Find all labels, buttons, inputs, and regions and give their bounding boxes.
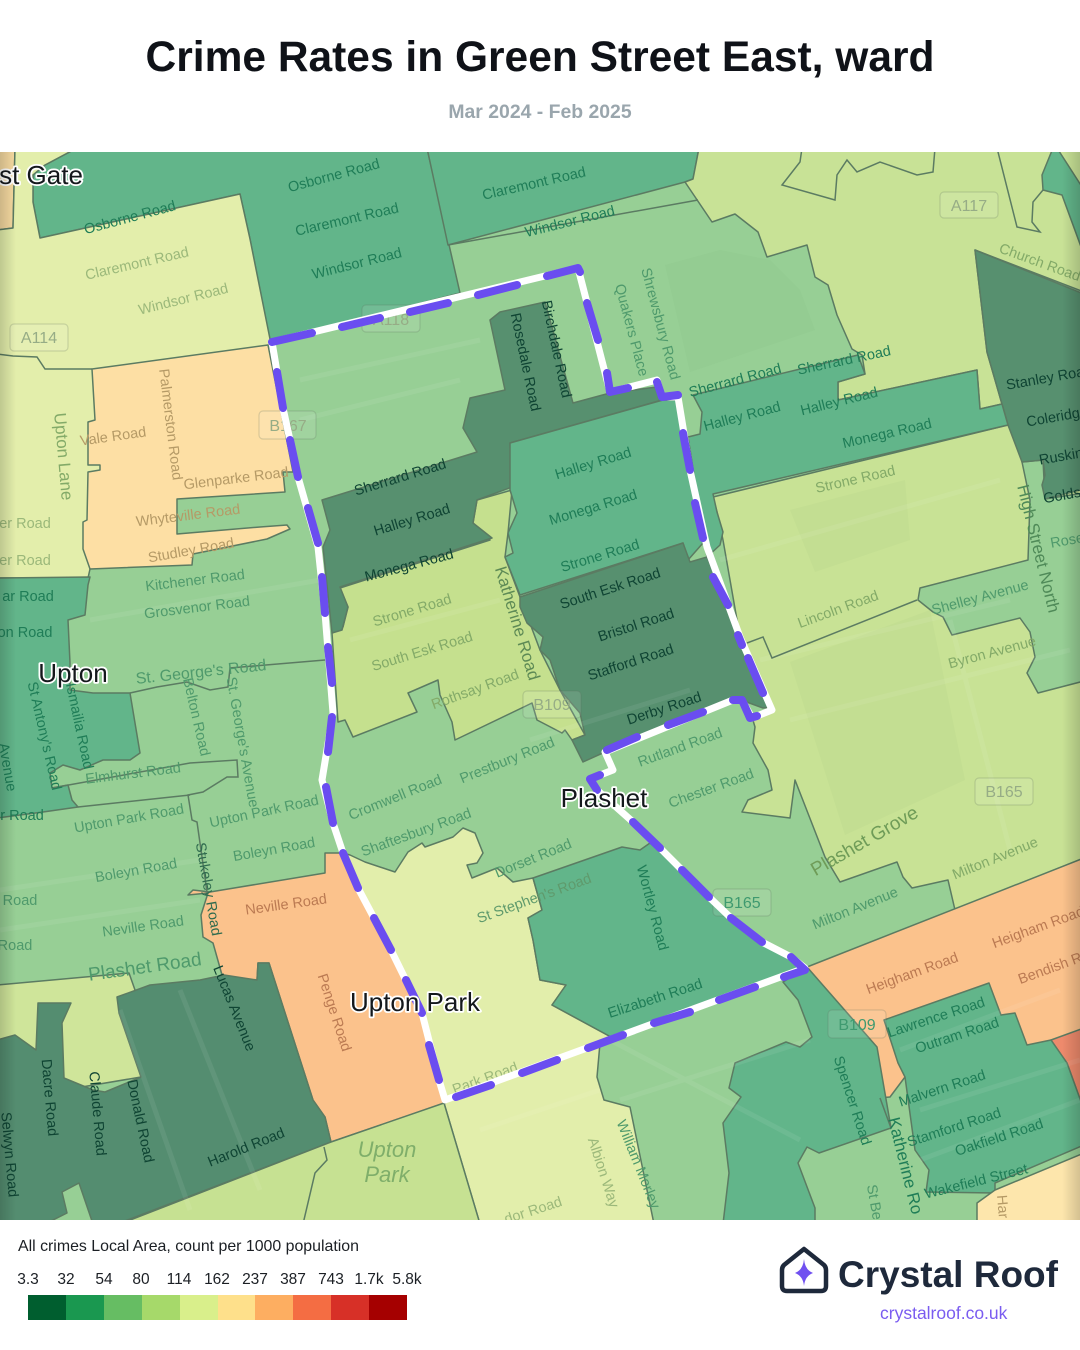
area: Claremont Road north bbox=[427, 148, 699, 245]
place names: Upton bbox=[38, 658, 108, 688]
street labels: Harold Road bbox=[206, 1125, 287, 1171]
street labels: St. George's Avenue bbox=[223, 676, 261, 809]
park label: Upton Park: Upton bbox=[358, 1137, 416, 1162]
street labels: Cromwell Road bbox=[346, 772, 444, 824]
area: west edge teal bbox=[0, 577, 140, 818]
street labels: Monega Road bbox=[547, 487, 639, 529]
legend scale values bbox=[17, 1271, 422, 1288]
street labels: Har bbox=[993, 1194, 1011, 1219]
street labels: Shaftesbury Road bbox=[359, 806, 474, 860]
legend scale values: 743 bbox=[318, 1271, 344, 1288]
street labels: Prestbury Road bbox=[458, 735, 557, 787]
street labels: ar Road bbox=[2, 589, 54, 605]
area: Lincoln Road yellow bbox=[713, 425, 1080, 910]
street labels: Rothsay Road bbox=[429, 667, 521, 713]
street labels: Stukeley Road bbox=[192, 841, 224, 937]
street labels: Upton Park Road bbox=[73, 801, 185, 837]
street labels: Stamford Road bbox=[905, 1105, 1003, 1151]
street labels: Grosvenor Road bbox=[143, 594, 251, 622]
area: south pale bbox=[444, 1043, 654, 1224]
street labels: Chester Road bbox=[667, 766, 756, 812]
street labels: Park Road bbox=[450, 1060, 520, 1098]
street labels: Rutland Road bbox=[636, 725, 725, 771]
legend scale values: 54 bbox=[95, 1271, 113, 1288]
street labels: Wortley Road bbox=[633, 864, 671, 952]
area: Lawrence Road teal bbox=[884, 983, 1080, 1193]
street labels: er Road bbox=[0, 516, 51, 532]
street labels: Neville Road bbox=[244, 891, 328, 919]
area: Strone Road yellow bbox=[332, 490, 585, 740]
street labels: Milton Avenue bbox=[810, 884, 900, 933]
street labels: South Esk Road bbox=[558, 565, 663, 613]
street labels: Katherine Ro bbox=[884, 1115, 927, 1216]
street labels: Claremont Road bbox=[294, 200, 400, 240]
place names: st Gate bbox=[0, 160, 83, 190]
area: Rosedale and Sherrard dark bbox=[322, 302, 662, 633]
street labels: South Esk Road bbox=[370, 629, 475, 675]
area: Upton Park pale bbox=[343, 828, 611, 1100]
street labels: Birchdale Road bbox=[538, 299, 574, 399]
street labels bbox=[0, 156, 1080, 1228]
area: Rose and Shelley Avenue bbox=[918, 460, 1080, 693]
street labels: Milton Avenue bbox=[950, 834, 1040, 883]
area: south east cream bbox=[977, 1153, 1080, 1224]
legend scale values: 237 bbox=[242, 1271, 268, 1288]
street labels: Dacre Road bbox=[38, 1058, 60, 1137]
street labels: Wakefield Street bbox=[923, 1161, 1030, 1203]
place names: Upton Park bbox=[350, 987, 481, 1017]
legend scale values: 5.8k bbox=[392, 1271, 422, 1288]
area: Elizabeth Road teal bbox=[528, 843, 807, 1037]
area: Heigham Road orange bbox=[807, 858, 1080, 1098]
street labels: Penge Road bbox=[314, 972, 354, 1054]
area: Plashet west yellow bbox=[0, 973, 141, 1090]
ward boundary: dashed outline bbox=[272, 268, 805, 1100]
street labels: Whyteville Road bbox=[135, 502, 241, 530]
legend scale values: 32 bbox=[57, 1271, 75, 1288]
street labels: Boleyn Road bbox=[94, 856, 178, 886]
area: Halley Road centre teal bbox=[505, 400, 703, 595]
area: Spencer Road teal bbox=[723, 967, 891, 1224]
street labels: Sherrard Road bbox=[352, 456, 448, 500]
area: Upton Park recreation bbox=[120, 1103, 480, 1224]
street labels: Donald Road bbox=[123, 1078, 157, 1164]
street labels: Lincoln Road bbox=[796, 588, 881, 632]
street labels: Elmhurst Road bbox=[85, 760, 182, 788]
street labels: Quakers Place bbox=[611, 282, 651, 378]
street labels: Oakfield Road bbox=[953, 1116, 1045, 1160]
subtitle: date range: Mar 2024 - Feb 2025 bbox=[448, 101, 632, 123]
place names bbox=[0, 160, 648, 1017]
road number shields: B165 bbox=[985, 784, 1023, 801]
road network overlay bbox=[0, 340, 1080, 1210]
street labels: Church Road bbox=[997, 241, 1080, 285]
street labels: Dorset Road bbox=[493, 836, 574, 882]
street labels: Sherrard Road bbox=[796, 343, 892, 379]
road number shields: B167 bbox=[269, 418, 307, 435]
street labels: r Road bbox=[0, 808, 44, 824]
area: far left corner bbox=[0, 148, 15, 230]
legend bbox=[17, 1238, 422, 1320]
road number shields bbox=[10, 192, 1033, 1038]
street labels: Palmerston Road bbox=[155, 368, 185, 481]
street labels: Claremont Road bbox=[84, 244, 190, 284]
street labels: Strone Road bbox=[371, 591, 454, 631]
street labels: St. George's Road bbox=[135, 657, 267, 688]
street labels: Ismailia Road bbox=[62, 682, 96, 771]
street labels: Halley Road bbox=[372, 501, 452, 540]
area: Halley Road east bbox=[688, 355, 1008, 557]
street labels: St Antony's Road bbox=[24, 680, 64, 792]
street labels: Bristol Road bbox=[596, 606, 676, 645]
street labels: Lucas Avenue bbox=[209, 963, 258, 1054]
street labels: Katherine Road bbox=[491, 564, 544, 683]
street labels: Rosedale Road bbox=[507, 312, 543, 413]
place names: Plashet bbox=[561, 783, 648, 813]
street labels: Stafford Road bbox=[586, 641, 676, 684]
road number shields: B109 bbox=[838, 1017, 876, 1034]
street labels: Kitchener Road bbox=[145, 567, 246, 595]
street labels: Shelley Avenue bbox=[930, 577, 1030, 619]
legend scale values: 387 bbox=[280, 1271, 306, 1288]
area: South Esk dark bbox=[520, 543, 772, 762]
area: Penge Road orange bbox=[188, 853, 445, 1142]
street labels: Glenparke Road bbox=[183, 465, 290, 493]
street labels: Outram Road bbox=[913, 1015, 1001, 1057]
street labels: Vale Road bbox=[79, 424, 147, 450]
street labels: William Morley bbox=[613, 1118, 663, 1212]
area: north east pale bbox=[685, 148, 1080, 425]
street labels: Spencer Road bbox=[830, 1054, 874, 1147]
area: Palmerston Road bbox=[83, 345, 293, 569]
street labels: Studley Road bbox=[147, 536, 235, 566]
logo url: crystalroof.co.uk bbox=[880, 1303, 1007, 1323]
district boundary lines bbox=[0, 148, 1043, 1224]
area: Claremont and Upton Lane pale bbox=[0, 148, 272, 578]
park label: Upton Park bbox=[358, 1137, 416, 1187]
title: Crime Rates in Green Street East, ward bbox=[146, 34, 934, 81]
road number shields: A118 bbox=[373, 312, 409, 329]
park label: Upton Park: Park bbox=[364, 1162, 411, 1187]
street labels: Monega Road bbox=[841, 416, 933, 452]
street labels: Strone Road bbox=[559, 537, 641, 576]
street labels: Upton Park Road bbox=[208, 793, 320, 831]
street labels: Plashet Road bbox=[87, 949, 203, 986]
choropleth map bbox=[0, 152, 1080, 1220]
area: Osborne and Windsor roads bbox=[33, 148, 460, 342]
street labels: Elizabeth Road bbox=[606, 976, 705, 1022]
icon: house with star bbox=[780, 1246, 828, 1294]
area: Stanley Road dark bbox=[975, 250, 1080, 499]
area: Harold Road dark bbox=[0, 963, 331, 1224]
street labels: Osborne Road bbox=[82, 198, 178, 238]
street labels: Claude Road bbox=[85, 1071, 109, 1157]
street labels: High Street North bbox=[1013, 483, 1063, 615]
logo wordmark: Crystal Roof bbox=[838, 1254, 1058, 1295]
street labels: Neville Road bbox=[101, 913, 185, 941]
street labels: Heigham Road bbox=[864, 950, 961, 998]
street labels: Lawrence Road bbox=[886, 995, 987, 1041]
street labels: Halley Road bbox=[702, 399, 782, 435]
street labels: St Stephen's Road bbox=[475, 871, 594, 927]
street labels: Windsor Road bbox=[524, 203, 617, 241]
area: red corner bbox=[1051, 1028, 1080, 1110]
street labels: Derby Road bbox=[625, 689, 704, 729]
street labels: Osborne Road bbox=[286, 156, 382, 196]
street labels: Windsor Road bbox=[311, 245, 404, 283]
street labels: er Road bbox=[0, 553, 51, 569]
road number shields: A117 bbox=[951, 198, 987, 215]
street labels: Halley Road bbox=[553, 445, 633, 483]
street labels: Strone Road bbox=[814, 463, 897, 497]
street labels: Upton Lane bbox=[50, 412, 77, 501]
legend scale values: 1.7k bbox=[354, 1271, 384, 1288]
legend scale values: 114 bbox=[167, 1271, 191, 1288]
street labels: Coleridg bbox=[1025, 405, 1080, 431]
street labels: Monega Road bbox=[363, 546, 455, 585]
street labels: Halley Road bbox=[799, 385, 880, 419]
street labels: Claremont Road bbox=[481, 164, 587, 204]
road number shields: B165 bbox=[723, 895, 761, 912]
legend scale values: 162 bbox=[204, 1271, 230, 1288]
street labels: Windsor Road bbox=[137, 281, 230, 319]
street labels: Road bbox=[3, 893, 37, 909]
road number shields: B109 bbox=[533, 697, 571, 714]
legend scale values: 80 bbox=[132, 1271, 150, 1288]
road number shields: A114 bbox=[21, 330, 57, 347]
street labels: Boleyn Road bbox=[232, 835, 316, 865]
area: north east teal bbox=[1042, 148, 1080, 255]
street labels: Byron Avenue bbox=[947, 634, 1038, 672]
logo: Crystal Roof bbox=[780, 1246, 1058, 1323]
legend scale values: 3.3 bbox=[17, 1271, 39, 1288]
street labels: Shrewsbury Road bbox=[637, 266, 683, 382]
park blocks overlay bbox=[665, 250, 965, 835]
street labels: Plashet Grove bbox=[807, 802, 922, 881]
street labels: Belton Road bbox=[179, 676, 213, 758]
street labels: Albion Way bbox=[584, 1136, 622, 1211]
street labels: Malvern Road bbox=[897, 1067, 988, 1111]
legend colour ramp bbox=[28, 1295, 407, 1320]
street labels: Sherrard Road bbox=[687, 361, 783, 401]
legend title: All crimes Local Area, count per 1000 population bbox=[18, 1238, 359, 1255]
